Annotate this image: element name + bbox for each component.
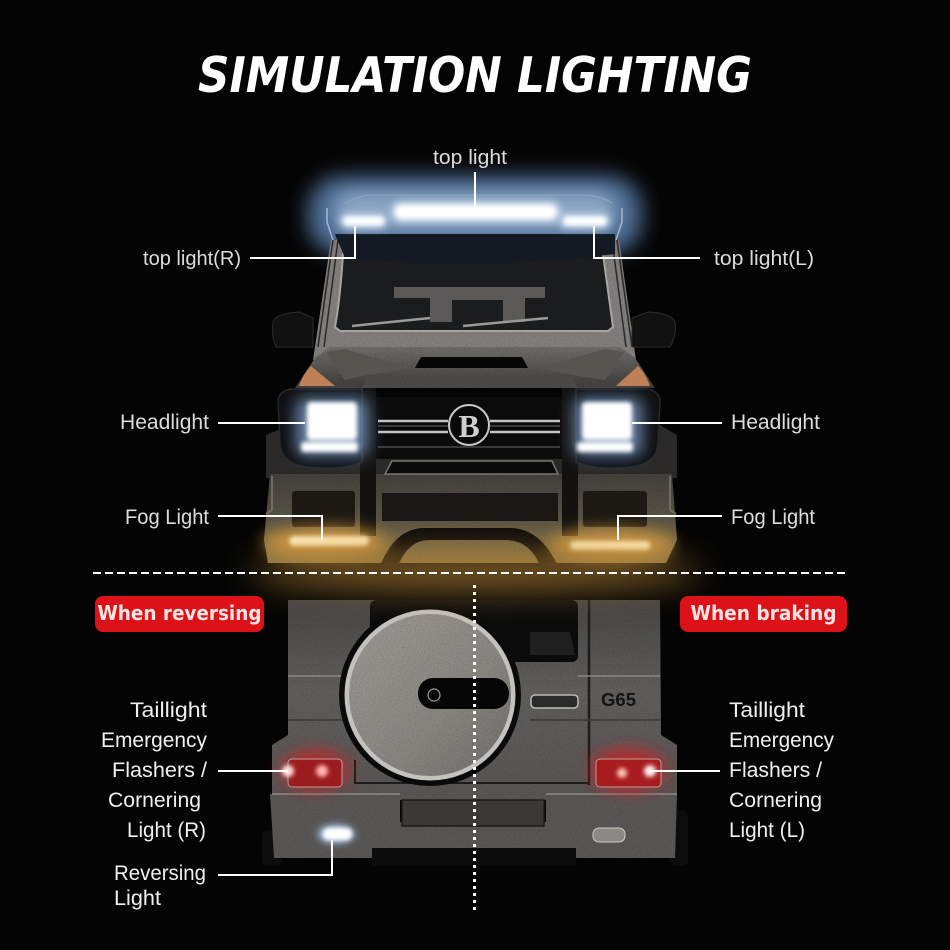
rear body (272, 600, 677, 800)
top light L (560, 214, 610, 228)
headlight housing right (576, 389, 660, 468)
rear tyres (262, 810, 688, 866)
taillight right (596, 759, 661, 787)
label: fog light left: Fog Light (125, 506, 209, 529)
side mirror right (632, 312, 675, 347)
panel: rear view of vehicle (262, 600, 688, 866)
label: top light L: top light(L) (714, 248, 814, 270)
callout: when reversing (95, 596, 264, 632)
headlight housing left (278, 389, 362, 468)
label: taillight left: Taillight (130, 699, 207, 722)
G65 badge: G65 (601, 690, 636, 710)
fog light glow (263, 527, 674, 561)
label: taillight right: Taillight (729, 699, 805, 722)
roof bar (327, 195, 622, 240)
taillight left (282, 759, 342, 787)
label: taillight left: Light (R) (127, 819, 206, 842)
callout: when reversing: When reversing (98, 601, 262, 625)
headlight glow left (296, 398, 368, 456)
panel: front view of vehicle (263, 176, 677, 566)
label: headlight right: Headlight (731, 411, 820, 434)
headlight right (577, 402, 633, 452)
side mirror left (272, 312, 313, 347)
hood (295, 347, 655, 388)
label: taillight right: Emergency (729, 729, 834, 752)
label: top light: top light (433, 147, 507, 169)
amber floor glow (250, 552, 700, 592)
fog light right (570, 541, 650, 550)
headlight left (301, 402, 358, 452)
label: headlight left: Headlight (120, 411, 209, 434)
label: taillight right: Flashers / (729, 759, 822, 782)
label: reversing light (114, 840, 332, 910)
top light R (340, 214, 386, 228)
label: top light R (143, 226, 355, 270)
label: reversing light: Reversing (114, 862, 206, 885)
headlight glow right (574, 398, 642, 456)
label: taillight left: Emergency (101, 729, 207, 752)
label: top light (433, 147, 507, 206)
callout: when braking (680, 596, 847, 632)
label: taillight left (101, 699, 288, 842)
label: fog light right (618, 506, 815, 540)
bull bar (360, 388, 578, 536)
label: top light R: top light(R) (143, 248, 241, 270)
label: fog light left (125, 506, 322, 540)
centre divider (473, 585, 476, 912)
reversing light (318, 825, 354, 843)
taillight glow (281, 748, 666, 792)
roof light glow (308, 176, 642, 254)
vehicle cab (313, 234, 636, 360)
wheel capsule logo (418, 678, 509, 709)
label: reversing light: Light (114, 887, 161, 910)
brabus badge (449, 405, 489, 445)
rear bumper (270, 794, 677, 866)
top light centre (392, 202, 560, 222)
door handle (531, 695, 578, 708)
label: taillight right: Light (L) (729, 819, 805, 842)
label: taillight left: Cornering (108, 789, 201, 812)
spare wheel (339, 604, 521, 786)
rear reflector (593, 828, 625, 842)
fog light left (289, 536, 369, 546)
label: top light L (594, 226, 814, 270)
lower body and bumper (264, 425, 677, 563)
callout: when braking: When braking (690, 601, 836, 625)
brabus badge: B (458, 408, 480, 444)
label: taillight right: Cornering (729, 789, 822, 812)
label: taillight right (650, 699, 834, 842)
skid plate (380, 528, 558, 566)
label: fog light right: Fog Light (731, 506, 815, 529)
grille (375, 397, 563, 459)
title: SIMULATION LIGHTING (198, 47, 752, 104)
label: taillight left: Flashers / (112, 759, 207, 782)
section divider (93, 572, 847, 574)
